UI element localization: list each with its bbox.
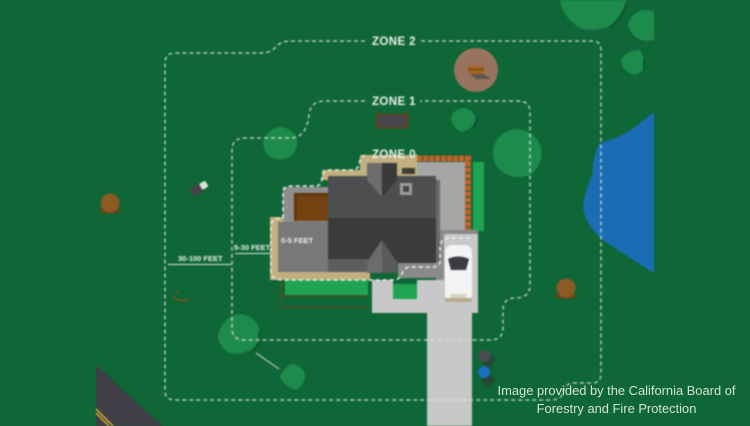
brush debris bbox=[173, 291, 189, 301]
equipment icon bbox=[189, 180, 209, 197]
garage patio bbox=[398, 162, 478, 280]
zone labels: 0-5 FEET bbox=[281, 236, 314, 245]
landscape beds bbox=[281, 278, 417, 307]
tree shadows bbox=[253, 4, 644, 350]
pond bbox=[583, 112, 654, 273]
car bbox=[445, 245, 472, 302]
stump left bbox=[99, 194, 121, 214]
garden bench bbox=[376, 110, 408, 129]
house roof bbox=[328, 163, 440, 273]
zone labels bbox=[178, 36, 416, 263]
orange brick border bbox=[417, 158, 468, 230]
green strip bbox=[473, 162, 484, 231]
zone 2 boundary bbox=[165, 41, 601, 400]
road bbox=[96, 365, 162, 426]
gravel zone bbox=[270, 155, 417, 280]
image credit caption: Forestry and Fire Protection bbox=[537, 400, 696, 416]
zone labels: ZONE 0 bbox=[372, 149, 416, 161]
zone labels: ZONE 2 bbox=[372, 36, 416, 48]
image credit caption bbox=[498, 383, 736, 416]
zone labels: 5-30 FEET bbox=[234, 243, 271, 252]
stump right bbox=[555, 278, 577, 298]
zone 0 boundary bbox=[271, 155, 470, 280]
zone 1 boundary bbox=[232, 101, 530, 340]
zone labels: ZONE 1 bbox=[372, 96, 416, 108]
driveway bbox=[372, 233, 478, 426]
seating circle with bench bbox=[454, 48, 498, 92]
trees bbox=[218, 0, 654, 390]
image credit caption: Image provided by the California Board of bbox=[498, 383, 735, 398]
side patio bbox=[278, 187, 328, 272]
zone labels: 30-100 FEET bbox=[178, 254, 223, 263]
trash bins bbox=[478, 350, 497, 388]
distance arrows bbox=[168, 254, 279, 369]
